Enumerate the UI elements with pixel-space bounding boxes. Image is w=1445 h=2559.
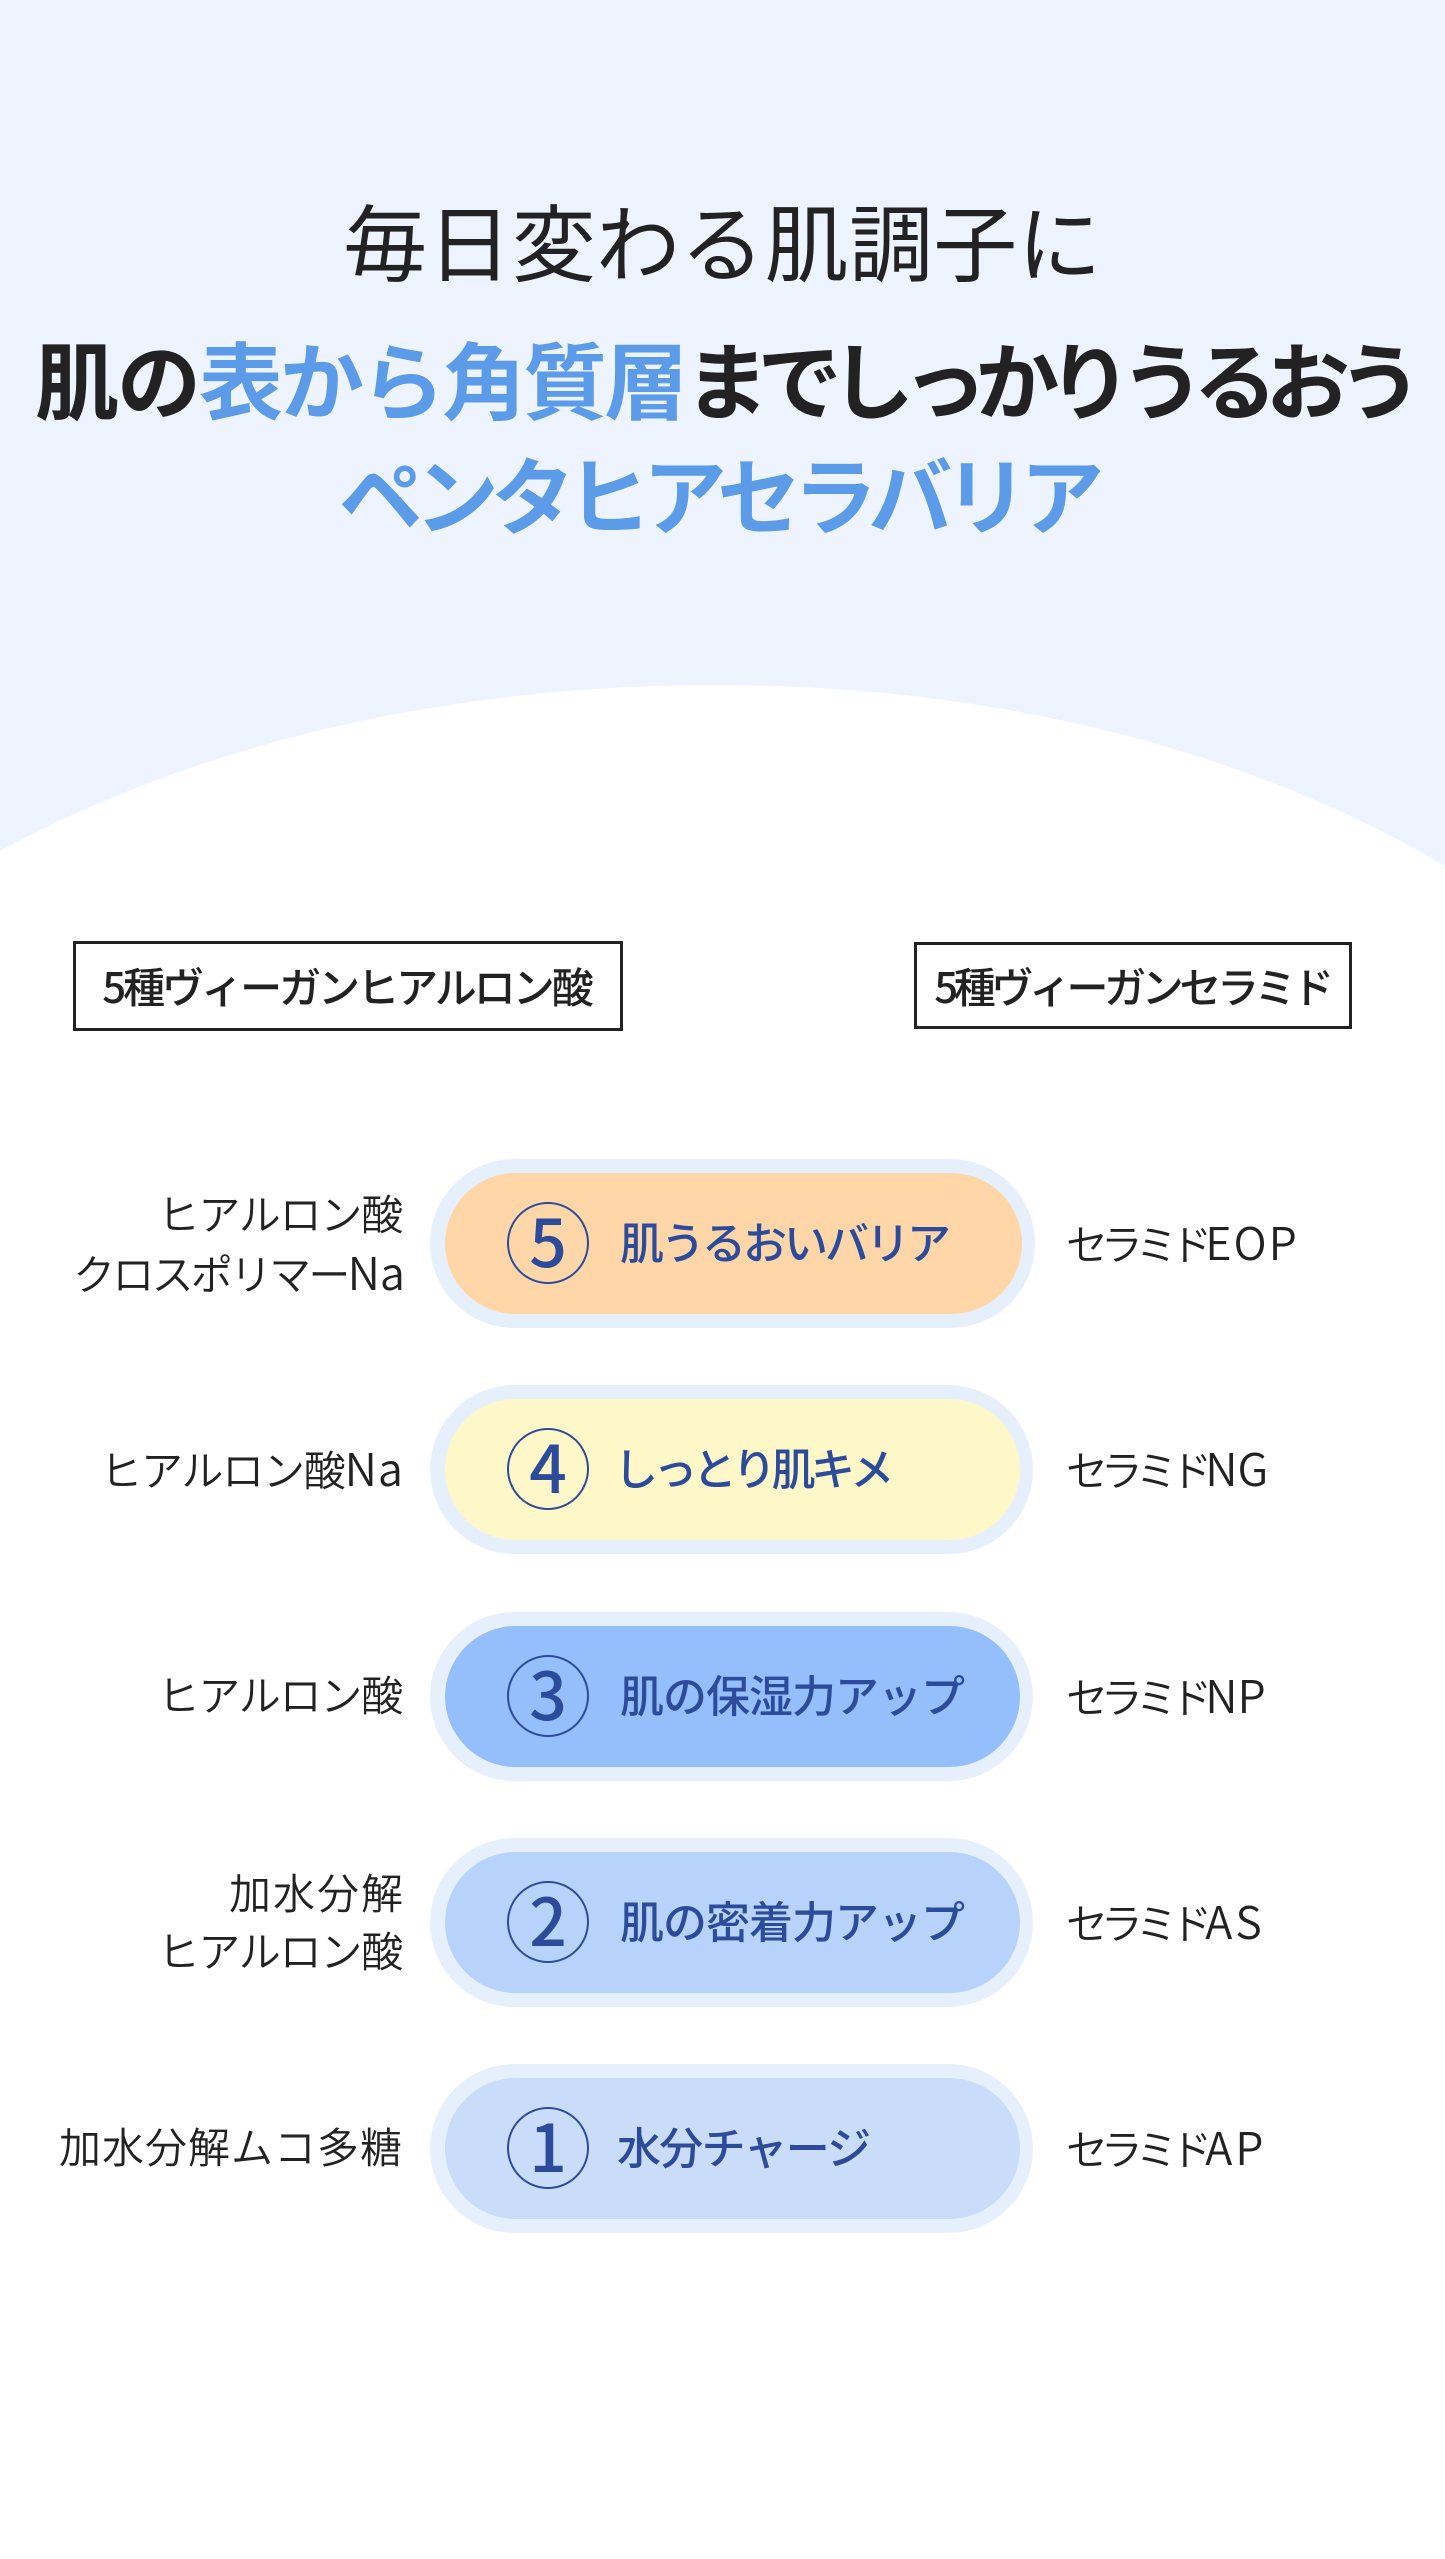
left label: 加水分解 (229, 1861, 405, 1922)
right label: セラミドAS (1066, 1887, 1265, 1952)
pill label: しっとり肌キメ (614, 1434, 890, 1498)
left label: ヒアルロン酸Na (100, 1434, 404, 1499)
title line 3: ペンタヒアセラバリア (339, 432, 1096, 553)
pill outer ring (430, 1385, 1033, 1554)
pill outer ring (430, 1838, 1033, 2007)
pill: 水分チャージ (445, 2078, 1020, 2219)
right label: セラミドAP (1066, 2113, 1266, 2178)
right column header box (914, 942, 1352, 1029)
left label (73, 1182, 405, 1303)
pill label: 肌の密着力アップ (620, 1887, 964, 1951)
header background with curved edge (0, 0, 1445, 866)
left label (158, 1861, 405, 1980)
left label: ヒアルロン酸 (158, 1182, 402, 1243)
left label: クロスポリマーNa (73, 1238, 405, 1303)
right column header box: 5種ヴィーガンセラミド (934, 954, 1330, 1016)
left label: ヒアルロン酸 (158, 1663, 402, 1724)
pill label: 水分チャージ (617, 2113, 869, 2177)
row 1 (59, 2064, 1266, 2233)
number 3 (507, 1655, 589, 1737)
number 5: 5 (529, 1191, 567, 1287)
pill outer ring (430, 1612, 1033, 1781)
title line 2: 肌の表から角質層までしっかりうるおう (35, 317, 1411, 438)
left column header box (73, 941, 623, 1031)
number 2 (507, 1881, 589, 1963)
number 1: 1 (529, 2096, 567, 2192)
title line 1: 毎日変わる肌調子に (343, 179, 1102, 300)
pill: 肌の保湿力アップ (445, 1626, 1020, 1767)
pill label: 肌うるおいバリア (620, 1208, 948, 1272)
pill: しっとり肌キメ (445, 1399, 1020, 1540)
left label: ヒアルロン酸 (158, 1919, 402, 1980)
number 5 (507, 1202, 589, 1284)
number 2: 2 (529, 1870, 567, 1966)
pill: 肌うるおいバリア (445, 1173, 1022, 1314)
row 3 (158, 1612, 1266, 1781)
pill label: 肌の保湿力アップ (620, 1661, 964, 1725)
row 2 (158, 1838, 1265, 2007)
number 1 (507, 2107, 589, 2189)
pill: 肌の密着力アップ (445, 1852, 1020, 1993)
number 4 (507, 1428, 589, 1510)
left column header box: 5種ヴィーガンヒアルロン酸 (102, 955, 591, 1016)
right label: セラミドNP (1066, 1661, 1266, 1726)
pill outer ring (430, 1159, 1035, 1328)
row 4 (100, 1385, 1268, 1554)
left label: 加水分解ムコ多糖 (59, 2115, 403, 2176)
right label: セラミドEOP (1066, 1208, 1299, 1273)
pill outer ring (430, 2064, 1033, 2233)
number 3: 3 (529, 1644, 567, 1740)
row 5 (73, 1159, 1299, 1328)
right label: セラミドNG (1066, 1434, 1268, 1499)
number 4: 4 (529, 1417, 567, 1513)
